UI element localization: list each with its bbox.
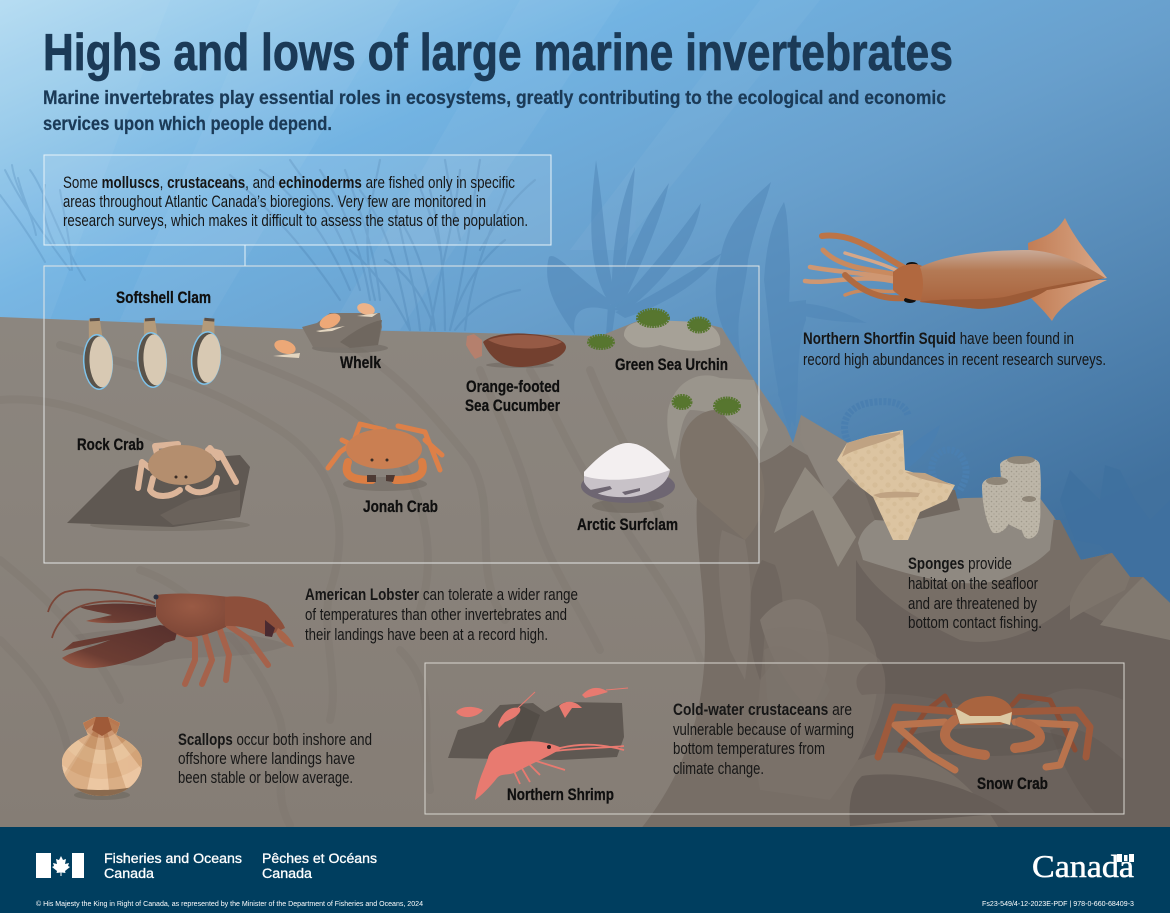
text: northern shortfin squid <box>803 329 1106 369</box>
subtitle: Marine invertebrates play essential roles in ecosystems, greatly contributing to the ecological and economic <box>43 87 946 109</box>
icon: whelks on rock <box>273 301 388 358</box>
label: northern shrimp: Northern Shrimp <box>507 786 614 804</box>
subtitle: services upon which people depend. <box>43 113 332 135</box>
text: american lobster: American Lobster can tolerate a wider range <box>305 585 578 604</box>
label: orange-footed sea cucumber: Sea Cucumber <box>465 397 560 415</box>
label: green sea urchin: Green Sea Urchin <box>615 356 728 374</box>
feathery seaweed left <box>0 165 85 280</box>
text: scallops <box>178 730 372 787</box>
arms <box>805 236 905 298</box>
kelp blade <box>905 425 940 470</box>
carapace <box>955 696 1012 725</box>
fins <box>1028 218 1107 290</box>
label: jonah crab: Jonah Crab <box>363 498 438 516</box>
text: sponges: and are threatened by <box>908 594 1037 613</box>
copyright line: © His Majesty the King in Right of Canada, as represented by the Minister of the Department of Fisheries and Oceans, 2024 <box>36 900 423 908</box>
publication number: Fs23-549/4-12-2023E-PDF | 978-0-660-68409-3 <box>982 901 1134 908</box>
wordmark: Canada: Canada <box>1032 848 1134 884</box>
feathery seaweed centre <box>230 160 535 330</box>
grey tube sponges <box>1000 457 1041 530</box>
seafloor <box>0 317 1170 830</box>
small shrimps <box>456 688 608 728</box>
icon: softshell clams <box>81 317 224 391</box>
subtitle <box>43 87 946 135</box>
tan sponge <box>837 430 955 540</box>
rock shadow under sponges <box>860 480 960 522</box>
panel: fished species box <box>44 266 759 563</box>
label: whelk: Whelk <box>340 354 382 372</box>
label: snow crab: Snow Crab <box>977 775 1048 793</box>
panel: intro text box <box>44 155 551 245</box>
text: cold-water crustaceans: vulnerable because of warming <box>673 720 854 739</box>
mantle <box>920 250 1105 308</box>
coral silhouette and worm shapes <box>844 402 1170 600</box>
label: softshell clam: Softshell Clam <box>116 289 211 307</box>
seafloor and rocks <box>0 317 1170 830</box>
text: american lobster <box>305 585 578 644</box>
background seaweed silhouettes <box>0 160 535 330</box>
text: cold-water crustaceans <box>673 700 854 778</box>
text: cold-water crustaceans: climate change. <box>673 759 764 778</box>
text: cold-water crustaceans: bottom temperatures from <box>673 739 825 758</box>
text: american lobster: of temperatures than other invertebrates and <box>305 605 567 624</box>
panel: connector line <box>244 245 246 266</box>
text: department signature: Canada <box>262 866 313 881</box>
text: sponges <box>908 554 1042 632</box>
mid rock mass <box>640 445 1170 830</box>
icon: arctic surfclam <box>581 443 675 513</box>
text: scallops: been stable or below average. <box>178 768 353 787</box>
icon: rock crab on rock <box>67 444 250 531</box>
icon: american lobster <box>48 590 294 684</box>
text: sponges: Sponges provide <box>908 554 1012 573</box>
intro paragraph <box>63 173 528 230</box>
label: arctic surfclam: Arctic Surfclam <box>577 516 678 534</box>
legs <box>178 625 268 684</box>
icon: northern shortfin squid <box>805 218 1107 321</box>
large shrimp <box>475 741 562 800</box>
icon: northern shrimp group <box>448 688 628 800</box>
icon: canadian flag symbol <box>36 853 84 878</box>
large kelp silhouettes <box>547 160 867 430</box>
tail <box>225 596 285 636</box>
legs <box>900 696 1075 750</box>
sand ripples <box>0 345 700 825</box>
icon: sponges <box>837 430 1041 540</box>
head <box>893 264 925 301</box>
text: sponges: bottom contact fishing. <box>908 613 1042 632</box>
shadow <box>75 628 290 666</box>
light rays <box>0 0 820 330</box>
urchin rock top <box>624 320 720 351</box>
icon: jonah crab <box>328 424 442 491</box>
intro paragraph: areas throughout Atlantic Canada’s bioregions. Very few are monitored in <box>63 192 486 211</box>
title: Highs and lows of large marine invertebrates <box>43 24 953 82</box>
icon: scallop <box>62 717 142 800</box>
text: cold-water crustaceans: Cold-water crustaceans are <box>673 700 852 719</box>
icon: snow crab <box>878 696 1090 770</box>
shrimp rock <box>448 702 624 760</box>
lower claw <box>62 625 178 668</box>
upper claw <box>80 604 156 623</box>
text: scallops: offshore where landings have <box>178 749 355 768</box>
claw ring <box>945 720 1040 755</box>
label: orange-footed sea cucumber <box>465 378 560 415</box>
text: sponges: habitat on the seafloor <box>908 574 1038 593</box>
icon: green sea urchins <box>589 310 739 414</box>
text: department signature: Fisheries and Oceans <box>104 851 242 866</box>
carapace <box>156 594 228 637</box>
urchin rock lower <box>667 375 768 460</box>
intro paragraph: Some molluscs, crustaceans, and echinoderms are fished only in specific <box>63 173 515 192</box>
text: department signature <box>104 851 377 881</box>
icon: orange-footed sea cucumber <box>466 333 566 368</box>
text: department signature: Pêches et Océans <box>262 851 377 866</box>
antennae <box>48 590 155 638</box>
branching coral right <box>1060 465 1170 600</box>
intro paragraph: research surveys, which makes it difficult to assess the status of the population. <box>63 211 528 230</box>
panel: cold-water crustaceans box <box>425 663 1124 814</box>
text: northern shortfin squid: Northern Shortfin Squid have been found in <box>803 329 1074 348</box>
dark rock patches <box>856 560 1170 830</box>
footer band <box>0 827 1170 913</box>
text: american lobster: their landings have been at a record high. <box>305 625 548 644</box>
label: rock crab: Rock Crab <box>77 436 144 454</box>
text: scallops: Scallops occur both inshore and <box>178 730 372 749</box>
eyes <box>906 262 918 268</box>
lighter rock shapes <box>800 415 856 500</box>
eye <box>154 594 158 600</box>
text: department signature: Canada <box>104 866 155 881</box>
label: orange-footed sea cucumber: Orange-footed <box>466 378 560 396</box>
tube worm arcs <box>844 402 966 490</box>
